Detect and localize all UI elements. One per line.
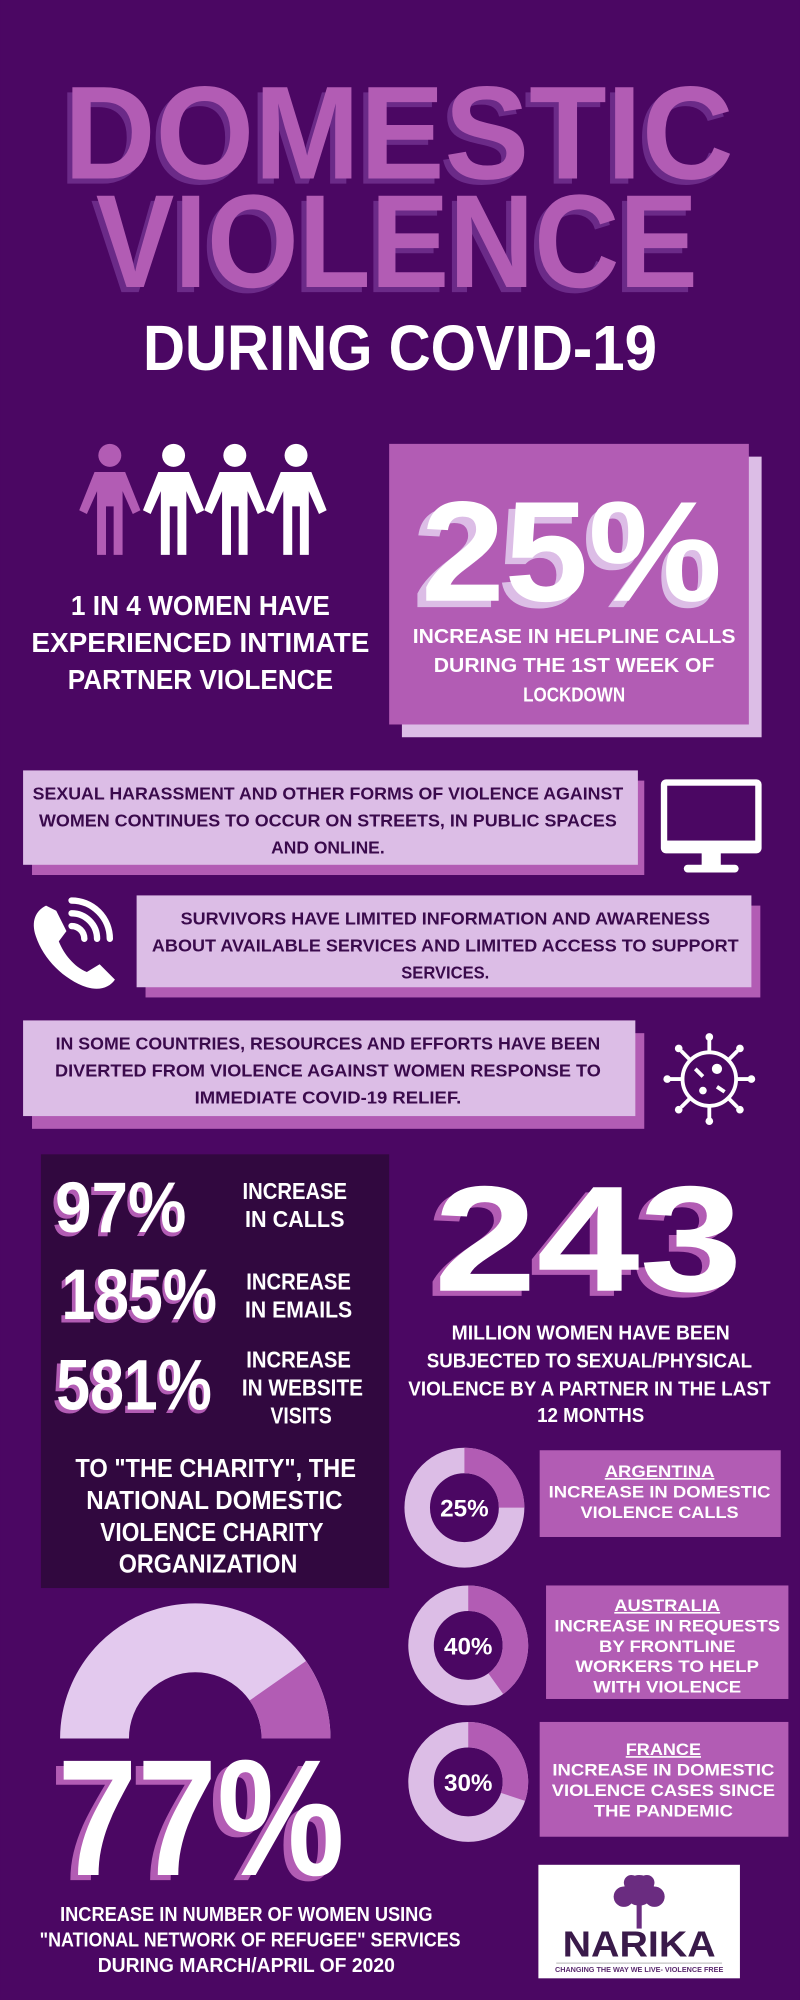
panel: france: INCREASE IN DOMESTIC [552,1761,774,1780]
title: VIOLENCE [96,168,698,316]
panel: france: FRANCE [626,1740,701,1759]
panel: resources diverted: IN SOME COUNTRIES, RESOURCES AND EFFORTS HAVE BEEN [56,1034,600,1054]
panel: sexual harassment [23,770,644,875]
panel: sexual harassment: WOMEN CONTINUES TO OCCUR ON STREETS, IN PUBLIC SPACES [39,811,617,831]
panel: argentina: INCREASE IN DOMESTIC [549,1482,771,1501]
stat: 581%: 581% [56,1345,212,1425]
stat: 185%: INCREASE [246,1269,351,1295]
logo: narika: CHANGING THE WAY WE LIVE- VIOLENCE FREE [555,1965,723,1974]
panel: 25% helpline: 25% [412,479,718,638]
panel: charity stats: VIOLENCE CHARITY [100,1519,323,1547]
stat: 185% [58,1255,352,1339]
subtitle: DURING COVID-19 [143,312,657,384]
panel: australia [546,1585,788,1699]
donut: australia 40% [421,1598,515,1693]
text: 1 in 4 women [31,590,369,695]
stat: 243 million: SUBJECTED TO SEXUAL/PHYSICAL [427,1350,752,1372]
donut: argentina 25%: 25% [440,1496,489,1523]
panel: resources diverted [23,1020,644,1129]
panel: sexual harassment: SEXUAL HARASSMENT AND OTHER FORMS OF VIOLENCE AGAINST [33,784,623,804]
panel: argentina: VIOLENCE CALLS [580,1503,739,1522]
donut: argentina 25% [417,1460,512,1555]
panel: australia: INCREASE IN REQUESTS [554,1616,780,1635]
text: 1 in 4 women: PARTNER VIOLENCE [68,664,333,695]
panel: 25% helpline: DURING THE 1ST WEEK OF [434,655,714,677]
panel: charity stats: TO "THE CHARITY", THE [75,1455,356,1483]
donut: france 30%: 30% [444,1770,492,1797]
stat: 243 million [408,1155,771,1427]
logo: narika: NARIKA [563,1925,716,1965]
icon: phone [34,901,115,989]
stat: 243 million: 12 MONTHS [537,1405,644,1427]
panel: france [540,1722,788,1837]
stat: 581% [52,1345,363,1429]
panel: charity stats: ORGANIZATION [119,1551,297,1579]
panel: survivors: SERVICES. [401,962,489,982]
text: refugee services [40,1904,461,1977]
panel: resources diverted: DIVERTED FROM VIOLENCE AGAINST WOMEN RESPONSE TO [55,1061,601,1081]
stat: 581%: VISITS [271,1402,332,1428]
stat: 97%: IN CALLS [245,1206,345,1232]
stat: 243 million: MILLION WOMEN HAVE BEEN [452,1322,730,1344]
panel: 25% helpline: LOCKDOWN [523,685,625,707]
stat: 243 million: VIOLENCE BY A PARTNER IN THE LAST [408,1378,771,1400]
panel: australia: AUSTRALIA [614,1596,720,1615]
panel: france: VIOLENCE CASES SINCE [552,1781,775,1800]
logo: narika [538,1865,740,1978]
panel: resources diverted: IMMEDIATE COVID-19 RELIEF. [195,1087,461,1107]
icon: monitor [661,779,762,872]
panel: australia: BY FRONTLINE [599,1637,735,1656]
stat: 97% [51,1168,347,1252]
text: refugee services: DURING MARCH/APRIL OF 2020 [98,1955,395,1977]
stat: 243 million: 243 [426,1160,735,1328]
panel: france: THE PANDEMIC [594,1801,733,1820]
title: DOMESTIC [59,65,728,213]
panel: survivors: SURVIVORS HAVE LIMITED INFORMATION AND AWARENESS [181,909,710,929]
stat: 581%: IN WEBSITE [242,1374,363,1400]
panel: survivors [137,895,760,997]
title: DOMESTIC [64,60,734,208]
panel: australia: WORKERS TO HELP [575,1657,759,1676]
icon: four people [79,444,327,555]
stat: 581%: INCREASE [246,1346,351,1372]
stat: 243 million: 243 [434,1155,742,1323]
title [59,60,734,321]
donut: france 30% [421,1735,515,1829]
panel: 25% helpline: 25% [421,473,722,632]
panel: 25% helpline [389,444,762,737]
stat: 77%: 77% [50,1731,337,1916]
stat: 97%: INCREASE [242,1178,347,1204]
stat: 97%: 97% [51,1172,185,1252]
panel: charity stats [41,1154,389,1588]
donut: australia 40%: 40% [444,1633,492,1660]
panel: australia: WITH VIOLENCE [593,1678,741,1697]
stat: 185%: IN EMAILS [245,1297,352,1323]
stat: 185%: 185% [58,1259,216,1339]
icon: virus [663,1033,755,1125]
title: VIOLENCE [91,173,693,321]
stat: 185%: 185% [61,1255,217,1335]
panel: charity stats: NATIONAL DOMESTIC [86,1487,343,1515]
gauge chart [95,1638,296,1739]
panel: argentina: ARGENTINA [605,1462,714,1481]
text: 1 in 4 women: 1 IN 4 WOMEN HAVE [71,590,330,621]
panel: 25% helpline: INCREASE IN HELPLINE CALLS [413,626,735,648]
panel: sexual harassment: AND ONLINE. [271,837,385,857]
text: 1 in 4 women: EXPERIENCED INTIMATE [31,627,369,658]
panel: survivors: ABOUT AVAILABLE SERVICES AND LIMITED ACCESS TO SUPPORT [152,936,739,956]
stat: 581%: 581% [52,1349,211,1429]
stat: 97%: 97% [55,1168,186,1248]
text: refugee services: INCREASE IN NUMBER OF WOMEN USING [60,1904,433,1926]
stat: 77%: 77% [58,1726,345,1911]
text: refugee services: "NATIONAL NETWORK OF REFUGEE" SERVICES [40,1929,461,1951]
panel: argentina [540,1450,781,1537]
